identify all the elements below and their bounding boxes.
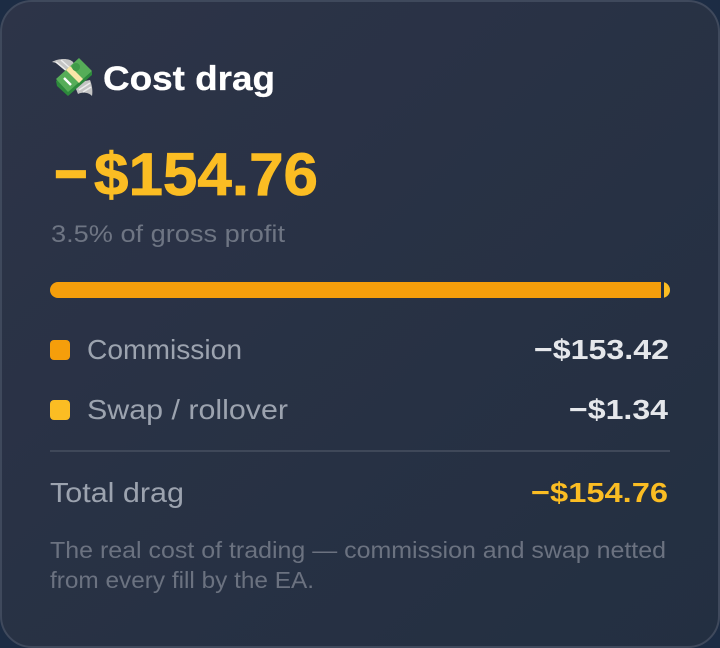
swatch: commission [50,340,70,360]
legend row: commission: Commission [87,334,242,365]
legend row: commission [50,334,669,365]
total row: Total drag [50,477,184,508]
total row [50,477,668,508]
icon: money with wings [52,58,92,96]
big value: total cost: − [55,146,87,204]
footnote: The real cost of trading — commission and swap netted [50,537,666,563]
big value: total cost: $154.76 [94,141,318,208]
heading: Cost drag: Cost drag [103,60,275,98]
footnote [50,537,666,593]
legend row: swap: −$1.34 [569,394,668,425]
text: share of gross profit: 3.5% of gross profit [51,221,285,248]
legend row: commission: −$153.42 [534,334,669,365]
swatch: swap [50,400,70,420]
footnote: from every fill by the EA. [50,567,314,593]
legend row: swap: Swap / rollover [87,394,288,425]
legend row: swap [50,394,668,425]
total row: −$154.76 [531,477,668,508]
bar chart: cost split [50,282,670,298]
